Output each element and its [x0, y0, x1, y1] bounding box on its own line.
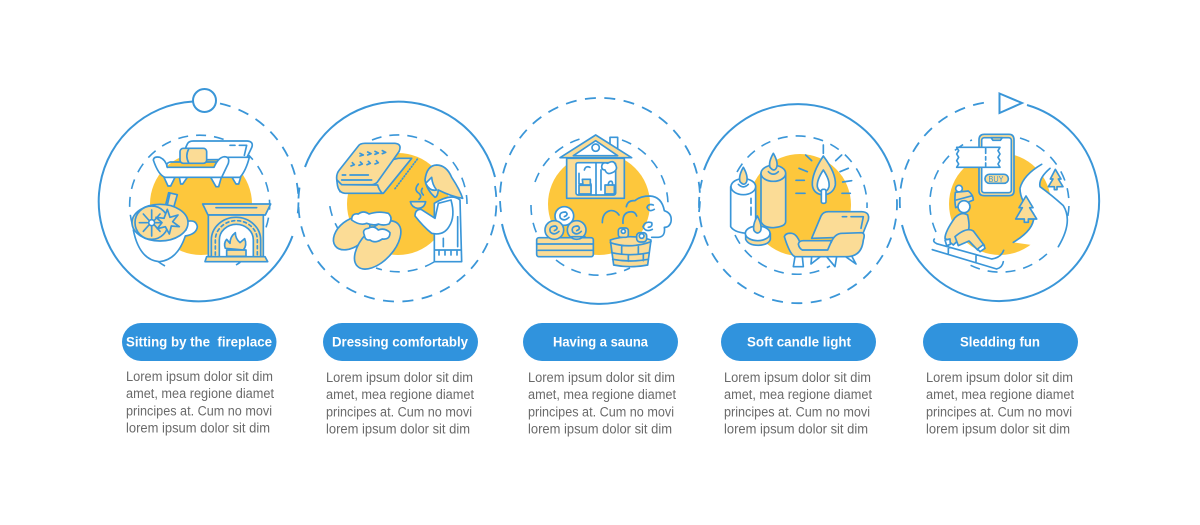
pill: having a sauna: Having a sauna — [553, 334, 648, 350]
yellow disc — [949, 153, 1051, 255]
pill: sledding fun — [923, 323, 1078, 361]
text block 2: principes at. Cum no movi — [326, 404, 472, 420]
text block 2: amet, mea regione diamet — [326, 387, 474, 402]
text block 2: lorem ipsum dolor sit dim — [326, 422, 470, 436]
pill: dressing comfortably: Dressing comfortably — [332, 334, 468, 350]
panel: dressing comfortably — [298, 102, 496, 302]
text block 2: Lorem ipsum dolor sit dim — [326, 370, 473, 385]
pill: soft candle light: Soft candle light — [747, 334, 851, 350]
text block 3: Lorem ipsum dolor sit dim — [528, 370, 675, 385]
panel: sitting by the fireplace — [99, 89, 298, 301]
text block 5: principes at. Cum no movi — [926, 404, 1072, 420]
pill: sitting by the fireplace: Sitting by the fireplace — [126, 334, 272, 350]
yellow disc — [347, 153, 449, 255]
text block 4: Lorem ipsum dolor sit dim — [724, 370, 871, 385]
text block 3: principes at. Cum no movi — [528, 404, 674, 420]
text block 3: amet, mea regione diamet — [528, 387, 676, 402]
outer ring — [699, 104, 897, 303]
text block 5: lorem ipsum dolor sit dim — [926, 422, 1070, 436]
text block 4 — [724, 370, 872, 436]
panel: sledding fun — [900, 94, 1099, 301]
inner dashed ring — [930, 138, 1069, 272]
text block 5: amet, mea regione diamet — [926, 387, 1074, 402]
inner dashed ring — [531, 139, 668, 275]
panel: having a sauna — [500, 98, 700, 304]
outer ring with start node — [99, 89, 298, 301]
icon: candles, flame and armchair — [731, 145, 869, 267]
text block 2 — [326, 370, 474, 436]
pill: sitting by the fireplace — [122, 323, 276, 361]
yellow disc — [150, 153, 252, 255]
inner dashed ring — [329, 135, 467, 272]
text block 3: lorem ipsum dolor sit dim — [528, 422, 672, 436]
text block 4: lorem ipsum dolor sit dim — [724, 422, 868, 436]
outer ring — [500, 98, 700, 304]
text block 1: lorem ipsum dolor sit dim — [126, 420, 270, 436]
pill: dressing comfortably — [323, 323, 478, 361]
text block 5: Lorem ipsum dolor sit dim — [926, 370, 1073, 385]
text block 1: amet, mea regione diamet — [126, 386, 274, 401]
pill: sledding fun: Sledding fun — [960, 334, 1040, 350]
text block 3 — [528, 370, 676, 436]
pill: having a sauna — [523, 323, 678, 361]
inner dashed ring — [733, 136, 867, 274]
icon: phone ticket, road, trees and sled — [932, 134, 1067, 269]
text block 1: Lorem ipsum dolor sit dim — [126, 369, 273, 384]
label: BUY: BUY — [988, 175, 1004, 184]
text block 4: amet, mea regione diamet — [724, 387, 872, 402]
text block 1 — [126, 369, 274, 436]
panel: soft candle light — [699, 104, 897, 303]
icon: blanket, slippers and woman with tea — [327, 143, 463, 277]
outer ring — [298, 102, 496, 302]
text block 5 — [926, 370, 1074, 436]
pill: soft candle light — [721, 323, 876, 361]
icon: sofa, mulled wine and fireplace — [132, 141, 271, 262]
yellow disc — [548, 153, 650, 255]
icon: house, towels and sauna bucket — [537, 135, 671, 267]
outer ring with end arrow — [900, 94, 1099, 301]
text block 4: principes at. Cum no movi — [724, 404, 870, 420]
text block 1: principes at. Cum no movi — [126, 404, 272, 418]
yellow disc — [749, 154, 851, 256]
inner dashed ring — [130, 135, 270, 266]
